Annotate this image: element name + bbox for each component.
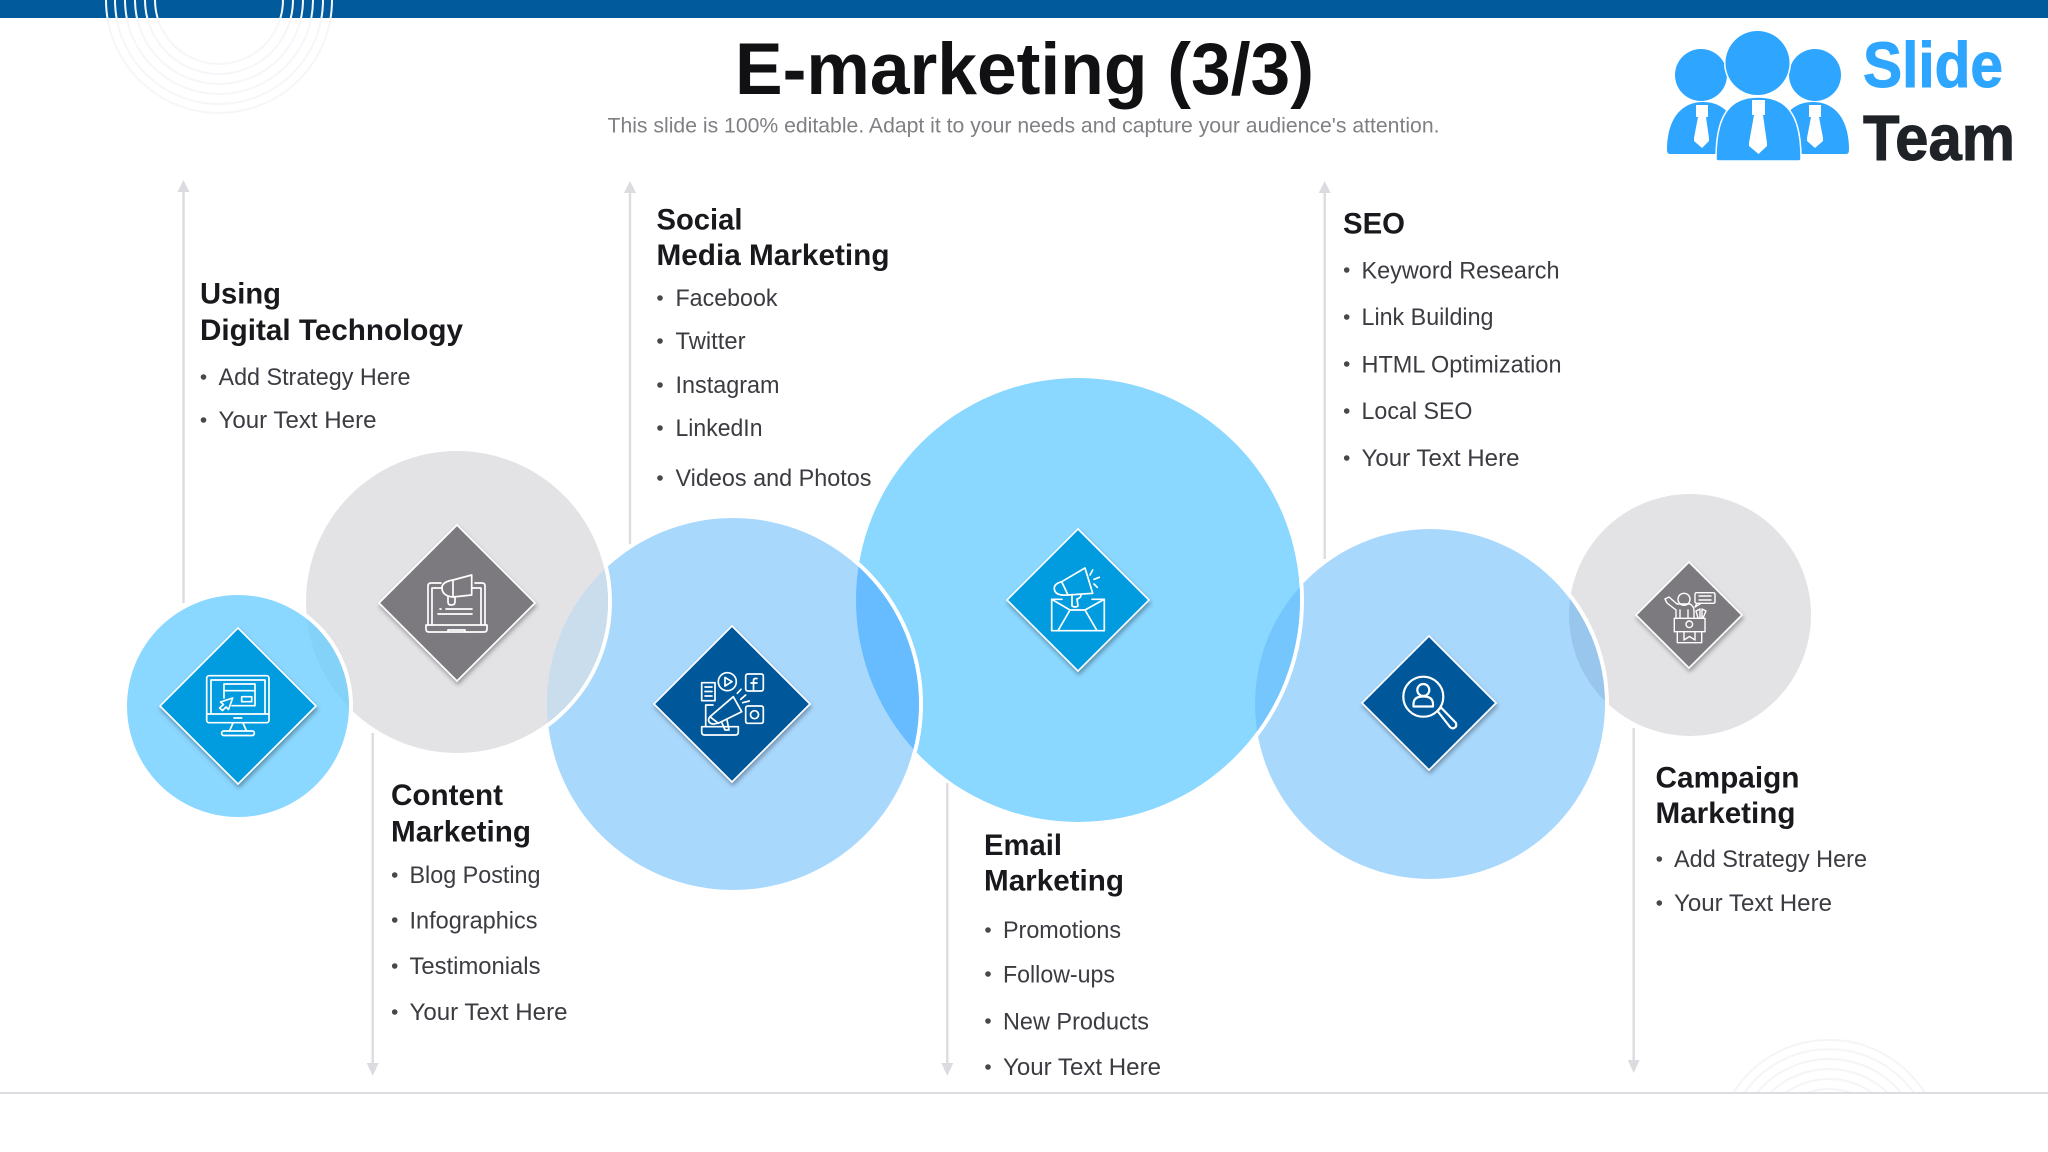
logo wordmark xyxy=(1863,29,2015,174)
diamond icon: social media xyxy=(654,626,810,782)
bullet list: Your Text Here xyxy=(1362,445,1520,472)
icon: social media megaphone xyxy=(702,673,763,735)
diamond icon: SEO xyxy=(1362,636,1496,770)
panel: SEO xyxy=(1343,208,1562,472)
bullet list: Videos and Photos xyxy=(676,465,872,492)
heading: Email xyxy=(984,829,1062,862)
bullet list xyxy=(985,917,1161,1081)
bullet list xyxy=(201,364,410,434)
logo wordmark: Team xyxy=(1863,102,2015,174)
heading: SEO xyxy=(1343,208,1405,240)
diamond icon: campaign marketing xyxy=(1636,562,1742,668)
bullet list: Infographics xyxy=(410,908,538,934)
panel: social media marketing xyxy=(656,204,890,492)
bullet list xyxy=(1344,258,1562,472)
bullet list: Promotions xyxy=(1003,917,1121,944)
heading xyxy=(1656,762,1800,830)
arrow: up, SEO xyxy=(1319,181,1331,559)
top bar xyxy=(0,0,2048,18)
heading xyxy=(656,204,890,272)
diamond icon: digital technology monitor xyxy=(160,628,316,784)
logo icon: three people xyxy=(1667,30,1849,161)
heading xyxy=(984,829,1124,898)
title: E-marketing (3/3) xyxy=(735,29,1314,110)
circle: SEO xyxy=(1255,529,1605,879)
bullet list: Your Text Here xyxy=(1003,1054,1161,1081)
heading: Media Marketing xyxy=(656,239,890,272)
icon: laptop with megaphone xyxy=(426,575,487,632)
circle: campaign marketing xyxy=(1569,494,1811,736)
arrow: up, digital technology xyxy=(178,180,190,603)
circle: email marketing xyxy=(856,378,1300,822)
subtitle: This slide is 100% editable. Adapt it to your needs and capture your audience's attention. xyxy=(608,112,1440,138)
bullet list: Local SEO xyxy=(1362,398,1472,425)
panel: content marketing xyxy=(391,779,568,1026)
heading: Campaign xyxy=(1656,762,1800,794)
arrow: down, content marketing xyxy=(367,733,379,1076)
arrow: down, campaign marketing xyxy=(1628,728,1640,1073)
heading xyxy=(200,278,464,347)
icon: magnifier with person xyxy=(1403,677,1456,728)
heading: Digital Technology xyxy=(200,314,464,347)
logo wordmark: Slide xyxy=(1863,29,2003,101)
bullet list: LinkedIn xyxy=(676,415,762,442)
bullet list: Link Building xyxy=(1362,304,1494,331)
heading: Social xyxy=(656,204,742,236)
arrow: down, email marketing xyxy=(941,783,953,1076)
heading: Using xyxy=(200,278,281,310)
bullet list xyxy=(657,285,872,492)
diamond icon: email marketing xyxy=(1007,529,1149,671)
logo: Slide Team xyxy=(1667,29,2015,174)
heading xyxy=(391,779,531,848)
bullet list: Add Strategy Here xyxy=(218,364,410,391)
icon: speaker at podium xyxy=(1665,593,1715,643)
bullet list: Twitter xyxy=(676,328,746,355)
panel: using digital technology xyxy=(200,278,464,434)
bullet list: Testimonials xyxy=(410,953,541,980)
bullet list: Your Text Here xyxy=(1674,890,1832,917)
bullet list: Facebook xyxy=(676,285,778,312)
circle: content marketing xyxy=(306,451,608,753)
icon: envelope with megaphone xyxy=(1052,568,1104,631)
bullet list xyxy=(1656,846,1867,917)
panel: email marketing xyxy=(984,829,1161,1081)
bullet list: HTML Optimization xyxy=(1362,352,1562,378)
circle: social media marketing xyxy=(547,518,919,890)
heading: Marketing xyxy=(984,864,1124,898)
bullet list: Instagram xyxy=(676,372,780,399)
arrow: up, social media xyxy=(624,181,636,544)
panel: campaign marketing xyxy=(1656,762,1867,917)
bullet list: Your Text Here xyxy=(410,999,568,1026)
diamond icon: content marketing laptop xyxy=(379,525,535,681)
bullet list: Add Strategy Here xyxy=(1674,846,1867,873)
bullet list: Follow-ups xyxy=(1003,962,1115,988)
heading: Marketing xyxy=(1656,797,1796,830)
bullet list xyxy=(392,862,568,1026)
bullet list: Blog Posting xyxy=(410,862,540,889)
bullet list: Your Text Here xyxy=(218,407,376,434)
heading: Marketing xyxy=(391,816,531,848)
bullet list: Keyword Research xyxy=(1362,258,1560,284)
icon: monitor with cursor xyxy=(207,676,269,736)
heading: Content xyxy=(391,779,503,812)
bullet list: New Products xyxy=(1003,1008,1149,1036)
circle: using digital technology xyxy=(127,595,349,817)
